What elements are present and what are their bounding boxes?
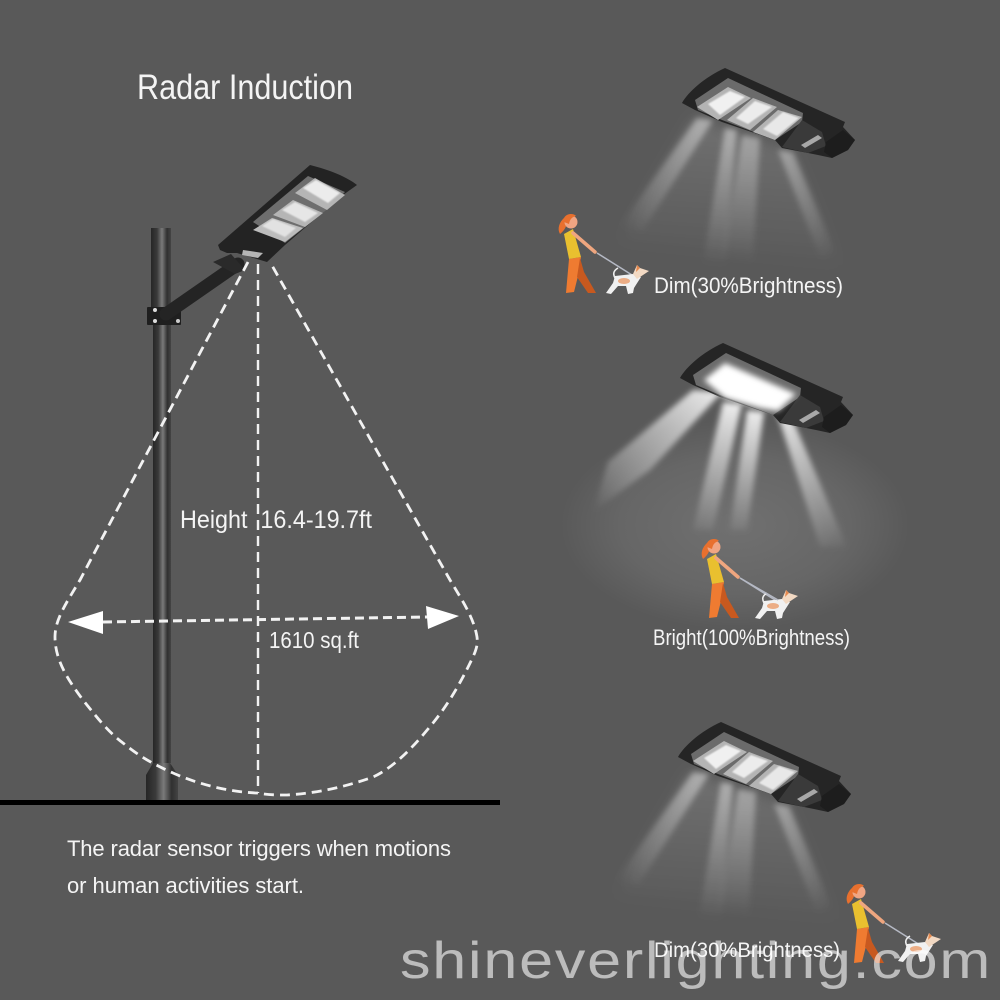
height label: Height 16.4-19.7ft [180, 506, 372, 534]
light beams [617, 118, 840, 265]
light beams [613, 772, 836, 919]
dashed detection zone outline [55, 262, 477, 795]
person walking dog [847, 884, 941, 963]
panel: dim state top [559, 68, 855, 298]
mounting arm and bracket [147, 254, 245, 325]
title: Radar Induction [137, 68, 353, 107]
caption: Dim(30%Brightness) [654, 939, 840, 962]
panel: dim state bottom [613, 722, 941, 963]
person walking dog [702, 539, 798, 619]
street light on pole with detection zone [55, 165, 477, 800]
pole [146, 228, 178, 800]
person walking dog [559, 214, 649, 294]
ground line [0, 800, 500, 805]
vertical height dashed line [257, 264, 259, 793]
description text: The radar sensor triggers when motions [67, 836, 451, 861]
caption: Dim(30%Brightness) [654, 273, 843, 298]
ambient glow [560, 420, 910, 630]
lamp head [678, 722, 851, 812]
double arrow: coverage width [68, 606, 459, 634]
description text: or human activities start. [67, 873, 304, 898]
caption: Bright(100%Brightness) [653, 625, 850, 650]
solar lamp head [218, 165, 357, 262]
watermark: shineverlighting.com [400, 932, 992, 990]
description text [67, 836, 451, 898]
lamp head [680, 343, 853, 433]
light beams [593, 390, 847, 547]
area label: 1610 sq.ft [269, 627, 360, 653]
panel: bright state middle [560, 343, 910, 650]
lamp head [682, 68, 855, 158]
